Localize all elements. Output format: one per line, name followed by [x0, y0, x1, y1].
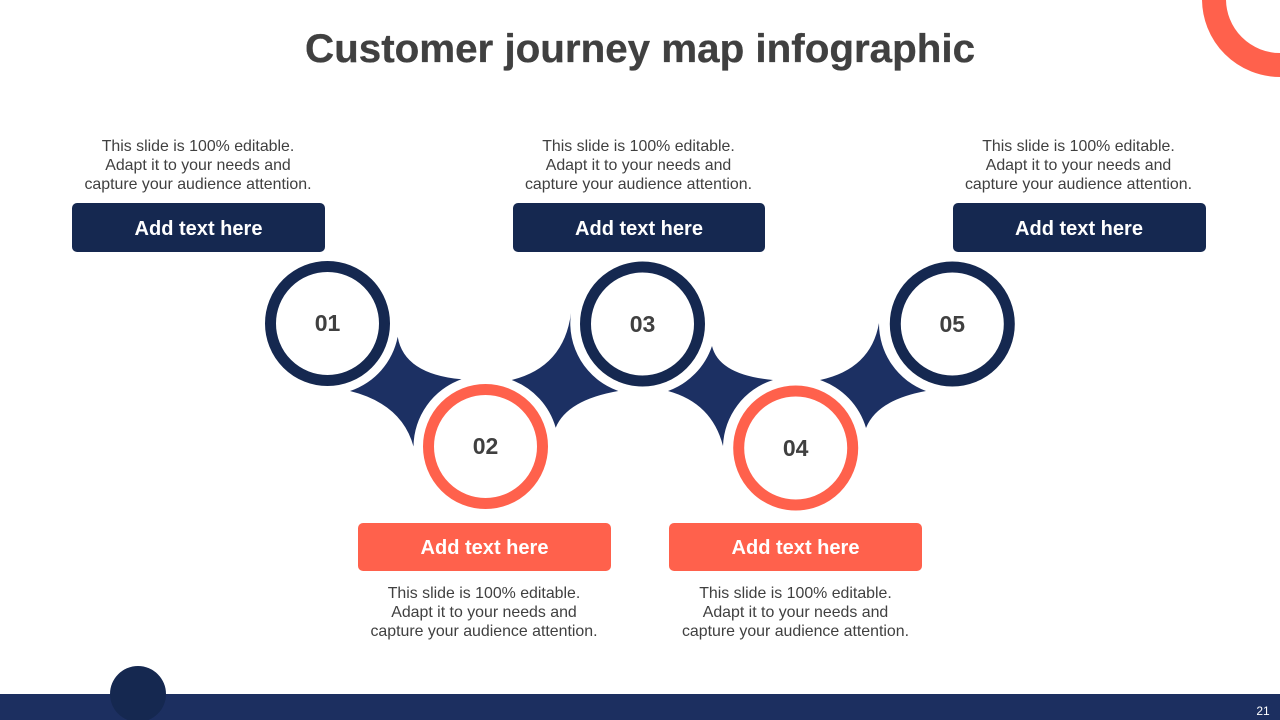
step 03 ring: 03 — [630, 311, 655, 337]
step 01 label box — [72, 203, 325, 252]
step 02 description — [370, 585, 598, 640]
step 01 description — [84, 138, 312, 193]
step 03 description: capture your audience attention. — [525, 176, 752, 193]
step 04 description: Adapt it to your needs and — [703, 604, 888, 621]
step 04 label box: Add text here — [732, 537, 860, 559]
page number: 21 — [1256, 704, 1270, 718]
step 04 ring: 04 — [783, 435, 809, 461]
step 05 description: Adapt it to your needs and — [986, 157, 1171, 174]
step 03 description: This slide is 100% editable. — [542, 138, 735, 155]
step 05 ring — [895, 267, 1009, 381]
step 04 description: This slide is 100% editable. — [699, 585, 892, 602]
footer bar — [0, 694, 1280, 720]
star connector 3-4 — [668, 346, 773, 446]
step 02 ring — [428, 390, 542, 504]
step 05 — [895, 138, 1206, 381]
step 04 ring — [739, 391, 853, 505]
step 03 ring — [586, 267, 700, 381]
step 05 ring: 05 — [940, 311, 965, 337]
step 03 label box — [513, 203, 765, 252]
step 04 — [669, 391, 922, 640]
step 03 description: Adapt it to your needs and — [546, 157, 731, 174]
star connector 2-3 — [512, 313, 618, 428]
step 02 ring: 02 — [473, 433, 498, 459]
step 05 description — [965, 138, 1192, 193]
star connector 4-5 — [820, 323, 926, 428]
step 01 description: capture your audience attention. — [84, 176, 312, 193]
step 02 label box — [358, 523, 611, 571]
footer circle — [110, 666, 166, 720]
step 04 description: capture your audience attention. — [682, 623, 909, 640]
step 02 — [358, 390, 611, 640]
step 01 description: Adapt it to your needs and — [105, 157, 291, 174]
step 01 description: This slide is 100% editable. — [102, 138, 294, 155]
title: Customer journey map infographic — [305, 27, 975, 71]
step 05 label box — [953, 203, 1206, 252]
step 02 description: capture your audience attention. — [370, 623, 598, 640]
step 01 label box: Add text here — [134, 218, 262, 240]
step 04 label box — [669, 523, 922, 571]
step 05 label box: Add text here — [1015, 218, 1143, 240]
step 02 label box: Add text here — [420, 537, 548, 559]
step 01 ring: 01 — [315, 310, 340, 336]
step 03 description — [525, 138, 752, 193]
step 04 description — [682, 585, 909, 640]
corner ring decoration — [1214, 0, 1280, 65]
step 02 description: This slide is 100% editable. — [388, 585, 580, 602]
step 03 label box: Add text here — [575, 218, 703, 240]
step 01 ring — [270, 266, 384, 380]
step 05 description: This slide is 100% editable. — [982, 138, 1175, 155]
step 01 — [72, 138, 384, 380]
step 05 description: capture your audience attention. — [965, 176, 1192, 193]
star connector 1-2 — [350, 337, 462, 446]
step 02 description: Adapt it to your needs and — [391, 604, 577, 621]
step 03 — [513, 138, 765, 381]
